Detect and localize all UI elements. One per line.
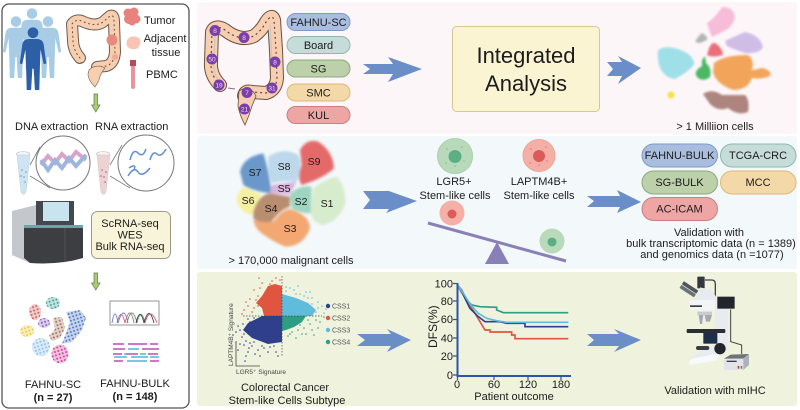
box: integrated analysis bbox=[452, 26, 600, 112]
panel: malignant cells background bbox=[197, 136, 797, 269]
arrow: subtype to outcome bbox=[357, 329, 411, 352]
legend: CSS subtypes bbox=[326, 304, 350, 346]
chart: integrated cell atlas UMAP bbox=[658, 7, 770, 113]
chart: malignant cell subclusters: S2 bbox=[295, 196, 308, 208]
callout: sequencing methods: ScRNA-seq bbox=[101, 218, 159, 230]
label: atlas cell count: > 1 Milliion cells bbox=[676, 121, 754, 133]
arrow: analysis to atlas bbox=[607, 56, 641, 84]
callout: sequencing methods bbox=[92, 212, 170, 258]
legend: CSS subtypes: CSS2 bbox=[332, 316, 350, 322]
chart: malignant cell subclusters: S7 bbox=[249, 167, 262, 179]
chart: sequencing reads bbox=[113, 344, 159, 361]
chart: disease-free survival curves: 180 bbox=[552, 379, 570, 391]
chart: sequencing chromatogram bbox=[110, 301, 159, 325]
icon: microscope bbox=[679, 277, 749, 370]
callout: sequencing methods: WES bbox=[117, 230, 143, 242]
pill: AC-ICAM bbox=[642, 198, 718, 220]
arrow: stem-like cells to validation bbox=[587, 190, 641, 213]
chart: stem-like subtype scatter plot: LGR5⁺ Signature bbox=[236, 369, 286, 376]
label: adjacent tissue: Adjacent bbox=[144, 33, 186, 45]
icon: tumor tissue bbox=[124, 8, 140, 26]
box: integrated analysis: Integrated bbox=[476, 43, 576, 68]
label: PBMC: PBMC bbox=[146, 69, 178, 81]
pill: Board: Board bbox=[304, 40, 333, 52]
pill: AC-ICAM: AC-ICAM bbox=[656, 204, 703, 216]
chart: disease-free survival curves bbox=[426, 278, 571, 403]
pill: SG: SG bbox=[311, 64, 326, 76]
arrow: cohorts to integrated analysis bbox=[363, 57, 422, 82]
label: tumor: Tumor bbox=[144, 15, 176, 27]
pill: MCC: MCC bbox=[745, 177, 771, 189]
chart: disease-free survival curves: 40 bbox=[441, 333, 453, 345]
label: RNA extraction: RNA extraction bbox=[95, 121, 168, 133]
chart: disease-free survival curves: 120 bbox=[519, 379, 537, 391]
chart: disease-free survival curves: 80 bbox=[441, 296, 453, 308]
pill: TCGA-CRC: TCGA-CRC bbox=[729, 150, 787, 162]
text: validation summary: and genomics data (n =1077) bbox=[640, 249, 784, 261]
box: integrated analysis: Analysis bbox=[485, 71, 567, 96]
icon: seesaw balance bbox=[428, 200, 566, 264]
icon: colon anatomy with sample counts: 7 bbox=[245, 90, 249, 97]
icon: colon anatomy with sample counts: 31 bbox=[268, 86, 276, 92]
chart: malignant cell subclusters: S9 bbox=[308, 156, 321, 168]
chart: FAHNU-SC tSNE clusters bbox=[20, 297, 86, 364]
icon: colon with tumor bbox=[72, 16, 118, 87]
pill: FAHNU-BULK bbox=[642, 144, 718, 167]
icon: colon anatomy with sample counts: 50 bbox=[208, 56, 216, 64]
label: DNA extraction: DNA extraction bbox=[15, 121, 88, 133]
chart: stem-like subtype scatter plot bbox=[228, 276, 326, 376]
chart: malignant cell subclusters: S6 bbox=[242, 195, 255, 207]
icon: patient silhouettes bbox=[3, 8, 61, 90]
chart: disease-free survival curves: 60 bbox=[441, 314, 453, 326]
icon: sequencing machine bbox=[12, 201, 83, 263]
label: mIHC validation: Validation with mIHC bbox=[664, 385, 766, 397]
legend: bulk validation cohorts bbox=[642, 144, 796, 220]
arrow: down to datasets bbox=[92, 273, 100, 290]
label: FAHNU-SC cohort: FAHNU-SC bbox=[25, 379, 81, 391]
label: FAHNU-SC cohort: (n = 27) bbox=[34, 392, 73, 404]
panel: subtype validation background bbox=[197, 272, 797, 406]
chart: disease-free survival curves: 20 bbox=[441, 351, 453, 363]
panel: integrated analysis background bbox=[197, 2, 797, 134]
label: malignant cell count: > 170,000 malignant cells bbox=[228, 255, 354, 267]
icon: colon anatomy with sample counts: 8 bbox=[242, 35, 246, 42]
pill: FAHNU-SC: FAHNU-SC bbox=[290, 17, 347, 29]
chart: malignant cell subclusters: S5 bbox=[278, 183, 291, 195]
icon: colon anatomy with sample counts: 19 bbox=[215, 82, 223, 90]
chart: disease-free survival curves: 0 bbox=[454, 379, 460, 391]
chart: disease-free survival curves: 100 bbox=[435, 278, 453, 290]
icon: DNA tube with lens bbox=[16, 136, 90, 194]
label: LAPTM4B+ stem-like cells: Stem-like cells bbox=[504, 190, 575, 202]
label: FAHNU-BULK cohort: (n = 148) bbox=[113, 391, 158, 403]
chart: malignant cell subclusters: S3 bbox=[284, 223, 297, 235]
label: scatter plot caption: Stem-like Cells Subtype bbox=[229, 395, 345, 407]
text: validation summary: bulk transcriptomic data (n = 1389) bbox=[626, 238, 796, 250]
pill: FAHNU-BULK: FAHNU-BULK bbox=[645, 150, 715, 162]
legend: single-cell cohorts bbox=[287, 14, 350, 124]
chart: malignant cell subclusters: S1 bbox=[321, 198, 334, 210]
pill: TCGA-CRC bbox=[720, 144, 796, 167]
chart: disease-free survival curves: 60 bbox=[488, 379, 500, 391]
chart: malignant cell subclusters bbox=[237, 141, 345, 247]
chart: stem-like subtype scatter plot: LAPTM4B⁺ Signature bbox=[228, 303, 235, 366]
text: validation summary: Validation with bbox=[674, 227, 744, 239]
icon: colon anatomy with sample counts: 8 bbox=[273, 60, 277, 66]
icon: colon anatomy with sample counts bbox=[206, 17, 280, 125]
pill: SG-BULK bbox=[642, 171, 718, 194]
callout: sequencing methods: Bulk RNA-seq bbox=[95, 241, 165, 253]
icon: adjacent tissue bbox=[127, 36, 140, 49]
chart: disease-free survival curves: 0 bbox=[447, 370, 453, 382]
pill: SG-BULK: SG-BULK bbox=[655, 177, 704, 189]
label: LAPTM4B+ stem-like cells: LAPTM4B+ bbox=[511, 176, 567, 188]
pill: MCC bbox=[720, 171, 796, 194]
label: adjacent tissue: tissue bbox=[152, 47, 180, 59]
label: LGR5+ stem-like cells: LGR5+ bbox=[436, 176, 472, 188]
legend: CSS subtypes: CSS3 bbox=[332, 328, 350, 334]
label: FAHNU-BULK cohort: FAHNU-BULK bbox=[100, 378, 170, 390]
arrow: subclusters to stem-like cells bbox=[363, 190, 417, 213]
label: LGR5+ stem-like cells: Stem-like cells bbox=[420, 190, 491, 202]
pill: KUL: KUL bbox=[308, 110, 329, 122]
icon: colon anatomy with sample counts: 21 bbox=[241, 106, 248, 114]
legend: CSS subtypes: CSS1 bbox=[332, 304, 350, 310]
icon: RNA tube with lens bbox=[96, 135, 174, 194]
arrow: outcome to mIHC validation bbox=[587, 329, 641, 352]
legend: CSS subtypes: CSS4 bbox=[332, 340, 350, 346]
label: scatter plot caption: Colorectal Cancer bbox=[241, 382, 329, 394]
pill: SMC: SMC bbox=[306, 88, 331, 100]
icon: LAPTM4B+ cell bbox=[523, 140, 555, 172]
icon: LGR5+ cell bbox=[438, 138, 472, 174]
panel: sample collection and sequencing bbox=[2, 4, 189, 408]
chart: malignant cell subclusters: S8 bbox=[278, 161, 291, 173]
icon: colon anatomy with sample counts: 8 bbox=[213, 28, 217, 35]
chart: disease-free survival curves: DFS(%) bbox=[426, 305, 440, 348]
chart: malignant cell subclusters: S4 bbox=[265, 203, 278, 215]
arrow: down to extraction bbox=[92, 94, 100, 112]
icon: PBMC blood tube bbox=[130, 60, 136, 89]
chart: disease-free survival curves: Patient outcome bbox=[474, 391, 554, 403]
